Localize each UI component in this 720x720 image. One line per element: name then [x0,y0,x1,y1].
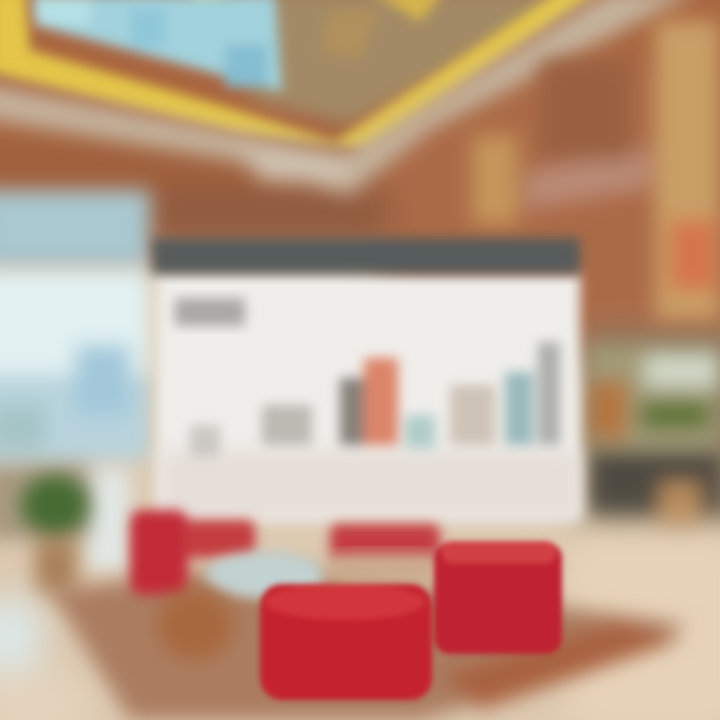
red seating [130,510,562,700]
left windows [0,190,150,570]
back sofa centre [330,524,440,560]
right lounge area [590,345,720,532]
ceiling recess [230,0,600,125]
ceiling [0,0,700,195]
back sofa left [130,510,255,595]
beige beam [0,0,700,195]
panel: board title block [175,298,245,326]
ottoman front [260,584,432,700]
wooden stool [157,590,233,660]
panel: dark header [152,238,580,274]
ottoman right [434,541,562,654]
wood wall and ceiling backdrop [0,0,720,530]
side table [330,555,440,585]
coffee table [205,551,325,599]
rug [50,565,690,720]
display panel [152,238,580,520]
floor [0,530,720,720]
panel: white board [157,274,580,520]
yellow trim [0,0,600,150]
plant [21,475,89,595]
skylight [32,0,282,92]
bar chart [190,342,560,457]
panel: lower band [160,450,580,520]
right wall art [472,20,720,320]
